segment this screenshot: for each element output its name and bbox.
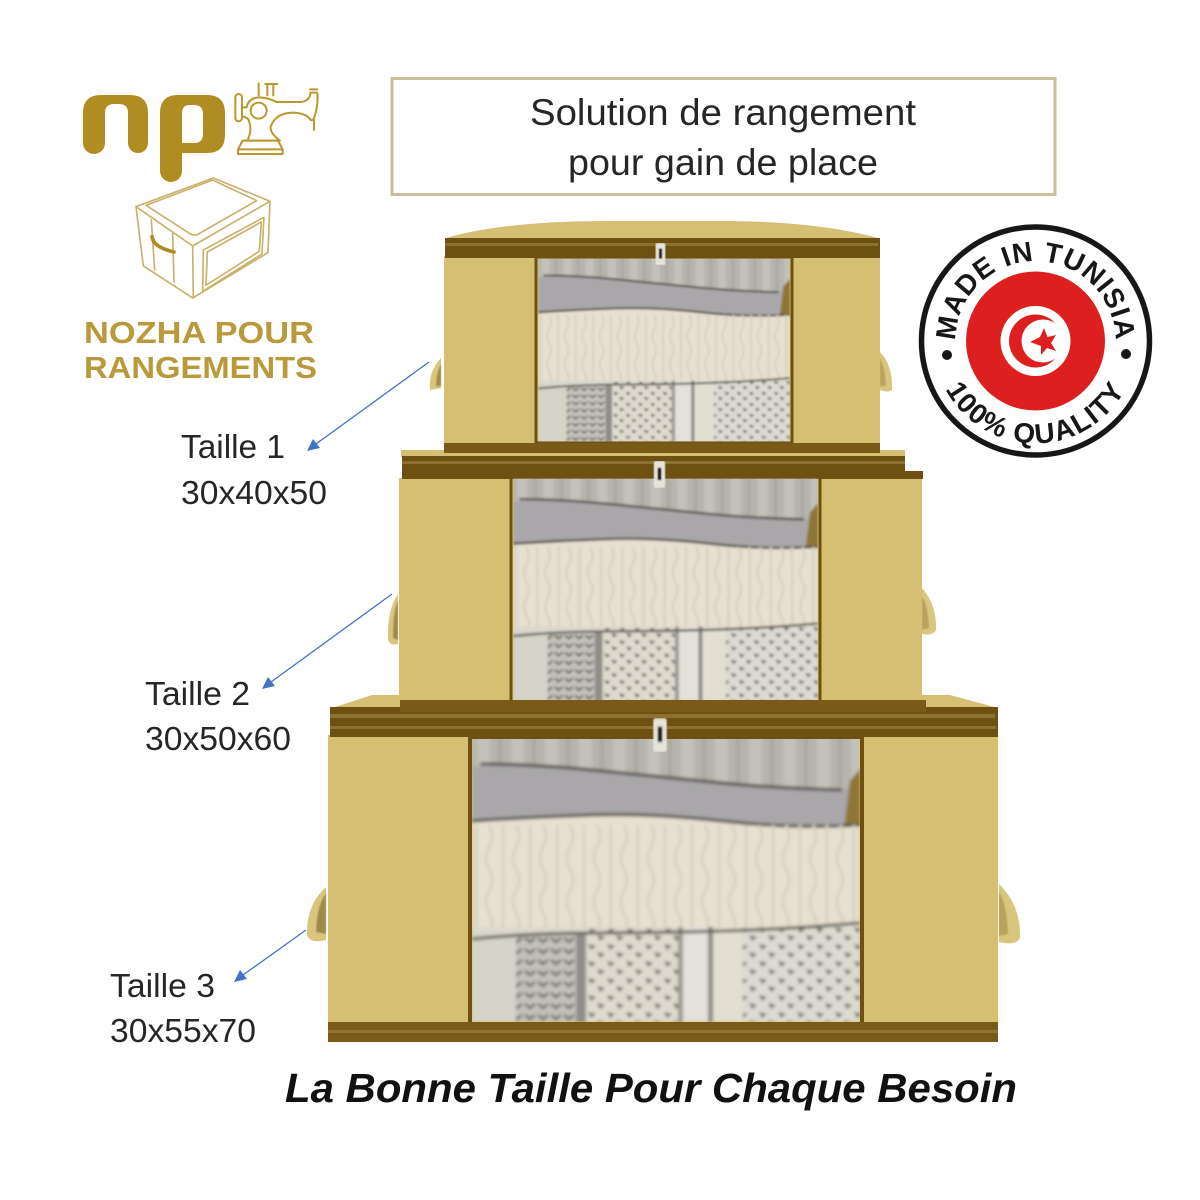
label: size 3 [110,967,256,1049]
heading box: pour gain de place [568,142,878,183]
logo wordmark: NOZHA POUR [84,315,314,350]
logo letters np [83,95,225,182]
heading box [392,78,1055,194]
label: size 1 [181,428,327,511]
flag of Tunisia [966,272,1105,410]
badge: made in Tunisia [918,224,1152,458]
box 1 small [430,221,892,453]
label: size 2: 30x50x60 [145,720,291,757]
box 2 medium [388,450,936,712]
box 3 large [307,695,1020,1042]
logo wordmark: RANGEMENTS [84,350,317,385]
arrow: size 1 [307,362,429,451]
arrow: size 3 [234,930,306,982]
badge: made in Tunisia: 100% QUALITY [946,380,1121,448]
caption: La Bonne Taille Pour Chaque Besoin [285,1065,1017,1111]
label: size 3: Taille 3 [110,967,215,1004]
label: size 3: 30x55x70 [110,1012,256,1049]
logo wordmark [84,315,317,385]
badge: made in Tunisia: MADE IN TUNISIA [936,242,1134,340]
icon: sewing machine [235,83,318,154]
arrow: size 2 [262,594,392,689]
label: size 1: Taille 1 [181,428,285,465]
label: size 1: 30x40x50 [181,474,327,511]
label: size 2 [145,675,291,757]
heading box: Solution de rangement [530,92,917,133]
logo: Nozha Pour Rangements [83,83,318,385]
label: size 2: Taille 2 [145,675,250,712]
icon: storage box outline [136,178,270,298]
